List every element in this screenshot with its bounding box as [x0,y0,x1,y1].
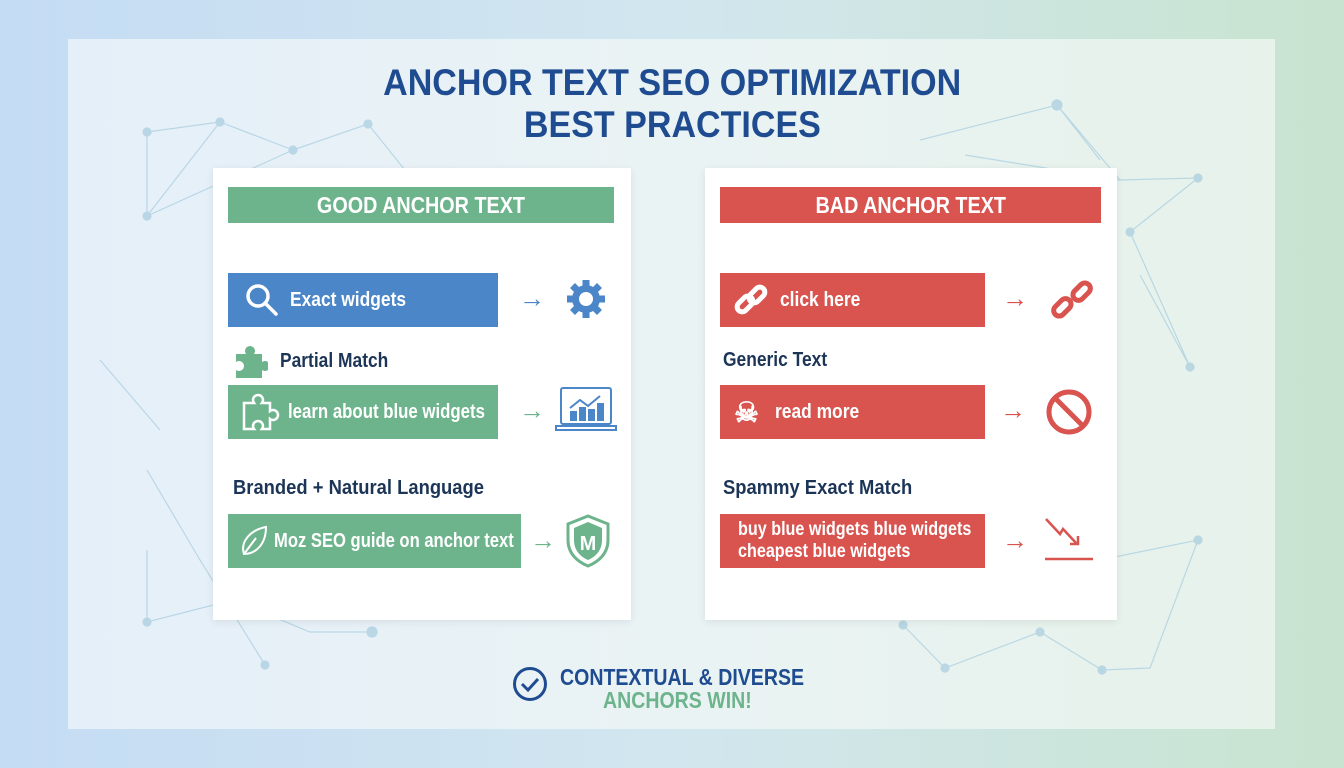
bar: spammy text: cheapest blue widgets [738,541,910,562]
heading: good [228,187,614,223]
icon: prohibited [1046,390,1092,434]
bar: moz [228,514,521,568]
icon: check circle [513,667,547,701]
bar: read more: ☠ [734,396,759,428]
bar: click here: click here [780,288,860,310]
heading: bad [720,187,1101,223]
label: spammy: Spammy Exact Match [723,477,912,499]
bar: moz: Moz SEO guide on anchor text [274,530,514,552]
footer callout [513,664,804,713]
panel: bad anchor text [705,168,1117,620]
heading: good: GOOD ANCHOR TEXT [317,192,525,218]
arrow: → [1002,525,1028,555]
icon: shield M: M [580,533,596,555]
arrow: → [1000,395,1026,425]
title: ANCHOR TEXT SEO OPTIMIZATION [383,62,961,103]
footer text: ANCHORS WIN! [603,687,752,713]
icon: laptop chart [555,387,617,431]
bar: spammy text: buy blue widgets blue widgets [738,519,971,540]
bar: learn about [228,385,498,439]
arrow: → [519,395,545,425]
arrow: → [1002,283,1028,313]
label: partial match [236,346,388,378]
icon: shield M [566,514,610,568]
bar: exact widgets: Exact widgets [290,288,406,310]
panel: good anchor text [213,168,631,620]
title [383,62,961,145]
bar: exact widgets [228,273,498,327]
bar: read more [720,385,985,439]
arrow: → [530,525,556,555]
bar: click here [720,273,985,327]
bar: learn about: learn about blue widgets [288,400,485,422]
label: partial match: Partial Match [280,350,388,372]
heading: bad: BAD ANCHOR TEXT [815,192,1006,218]
bar: read more: read more [775,400,859,422]
footer text [560,664,804,713]
icon: broken link [1051,280,1093,318]
footer text: CONTEXTUAL & DIVERSE [560,664,804,690]
bar: spammy text [720,514,985,568]
arrow: → [519,283,545,313]
label: generic text: Generic Text [723,349,827,371]
icon: gear [567,280,605,318]
title: BEST PRACTICES [524,104,820,145]
label: branded: Branded + Natural Language [233,477,484,499]
icon: downtrend [1045,518,1093,560]
